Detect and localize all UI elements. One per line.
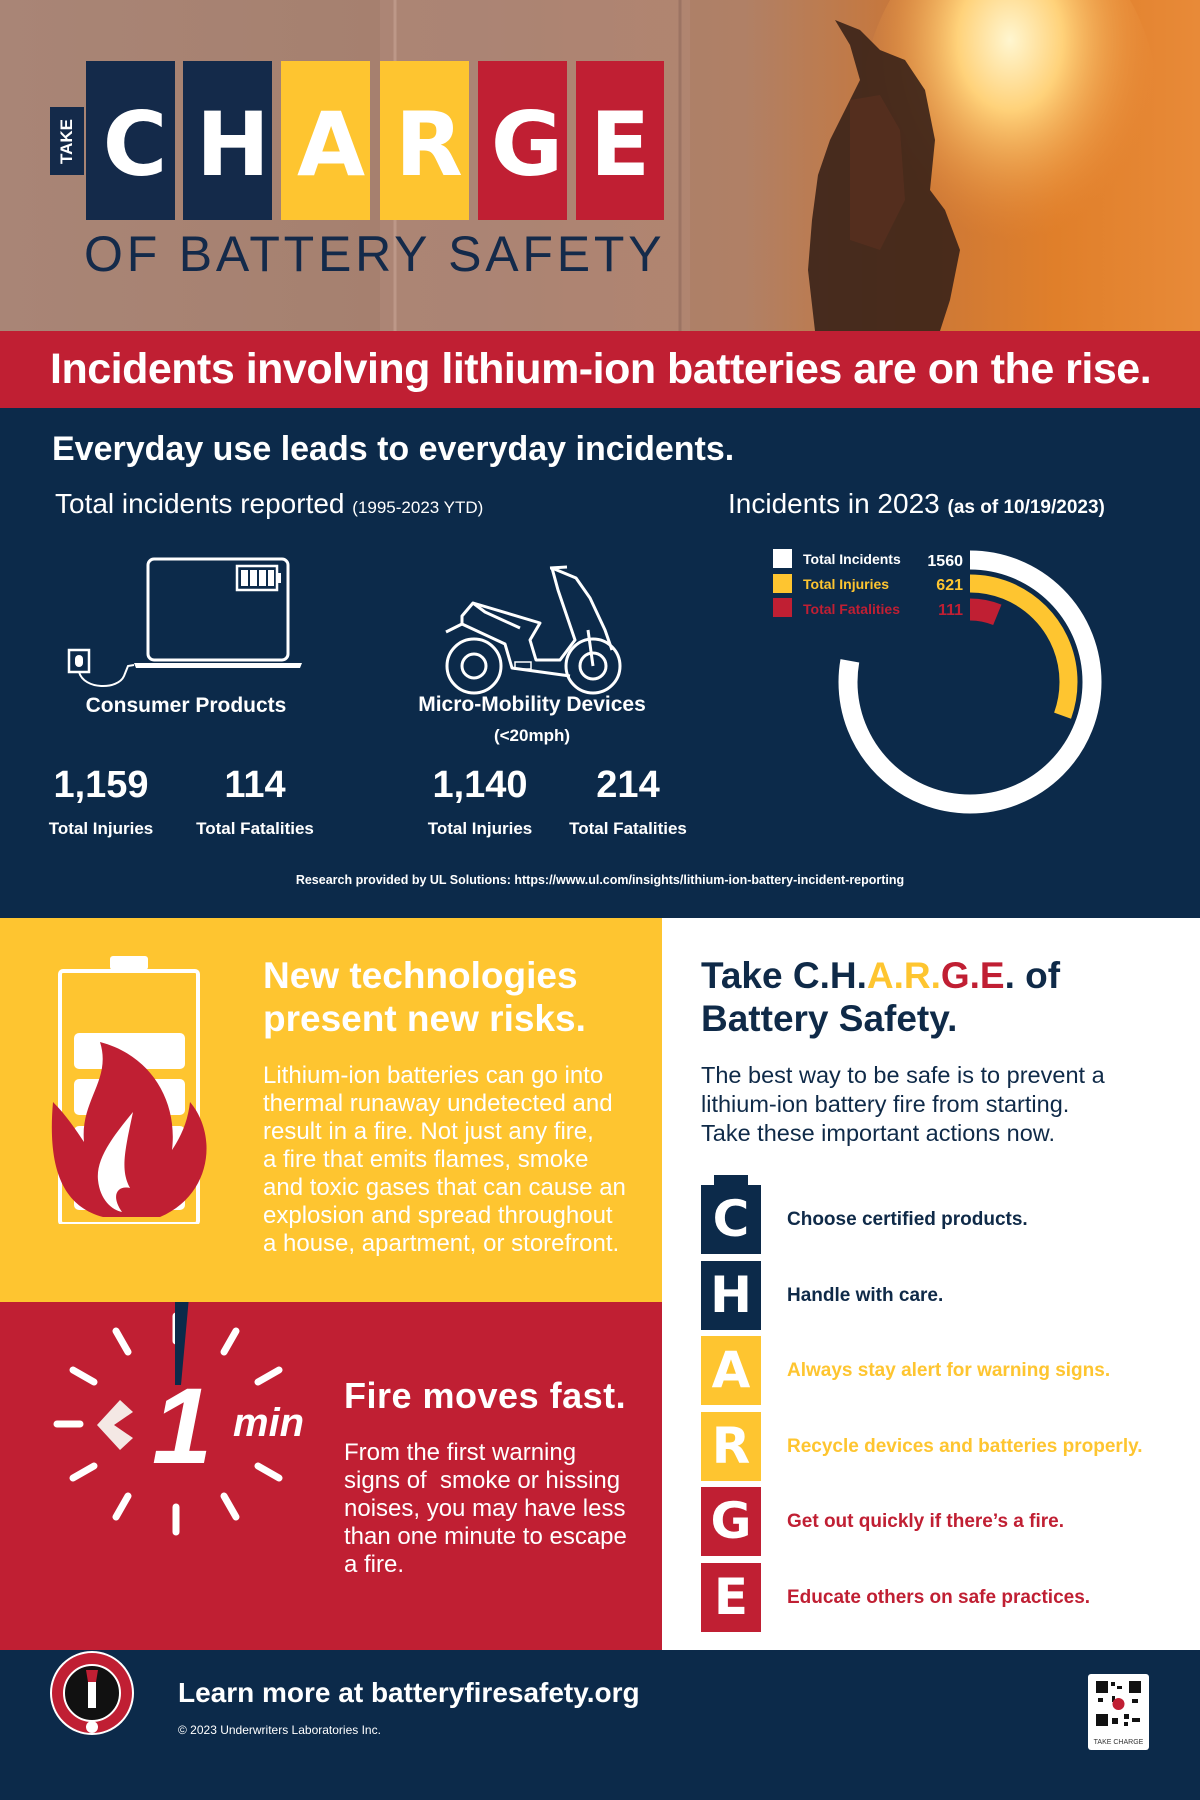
action list: Get out quickly if there’s a fire. [787,1511,1064,1532]
stat: mobility injuries: 1,140 [432,764,528,806]
action list: Choose certified products. [787,1209,1028,1230]
logo tiles [86,61,175,220]
stat: consumer injuries: 1,159 [53,764,149,806]
icon: one minute clock: min [233,1401,304,1445]
intro text: Take these important actions now. [701,1120,1055,1146]
donut chart: Total Injuries [803,576,889,592]
body text: and toxic gases that can cause an [263,1174,626,1201]
stat: consumer injuries: Total Injuries [49,819,153,838]
body text: than one minute to escape [344,1523,627,1550]
body text [263,1062,626,1257]
donut chart: 111 [938,602,963,619]
heading: Battery Safety. [701,998,957,1039]
stat: consumer injuries [48,764,153,838]
icon: one minute clock: 1 [152,1365,212,1486]
donut chart: 1560 [927,553,963,570]
panel: incident statistics [0,408,1200,918]
body text: thermal runaway undetected and [263,1090,613,1117]
CHARGE letter tiles [701,1175,761,1632]
heading: Everyday use leads to everyday incidents. [52,430,734,468]
learn more link text: Learn more at batteryfiresafety.org [178,1677,640,1708]
action list: Handle with care. [787,1285,943,1306]
banner: incidents on the rise [0,331,1200,408]
body text: result in a fire. Not just any fire, [263,1118,594,1145]
subheading 2023: Incidents in 2023 (as of 10/19/2023) [728,488,1105,519]
heading: Take C.H.A.R.G.E. of [701,955,1060,996]
body text: a fire. [344,1551,404,1578]
copyright: © 2023 Underwriters Laboratories Inc. [178,1723,381,1737]
heading: Fire moves fast. [344,1375,626,1416]
body text: a fire that emits flames, smoke [263,1146,588,1173]
label: consumer products: Consumer Products [86,694,286,717]
CHARGE letters: G [491,93,563,196]
panel: fire moves fast [0,1302,662,1650]
body text: noises, you may have less [344,1495,625,1522]
action list: Recycle devices and batteries properly. [787,1436,1143,1457]
body text: explosion and spread throughout [263,1202,613,1229]
action list: Educate others on safe practices. [787,1587,1090,1608]
TAKE tag: TAKE [57,118,76,164]
intro text: lithium-ion battery fire from starting. [701,1091,1069,1117]
TAKE tag [50,107,84,175]
panel: new technologies [0,918,662,1302]
CHARGE letters: C [103,93,167,196]
CHARGE letter tiles: E [714,1568,748,1626]
banner: incidents on the rise: Incidents involving lithium-ion batteries are on the rise. [50,345,1151,393]
logo: Take CHARGE of battery safety [50,61,665,282]
donut chart: 621 [936,577,963,594]
icon: scooter [445,566,622,694]
stat: consumer fatalities: Total Fatalities [196,819,314,838]
stat: mobility fatalities [569,764,687,838]
body text [344,1439,627,1578]
stat: mobility fatalities: 214 [596,764,660,806]
CHARGE letter tiles: H [710,1266,752,1324]
intro text [701,1062,1105,1146]
CHARGE letters: H [196,93,270,196]
CHARGE letters [103,93,650,196]
label: micro-mobility [418,693,646,745]
stat: mobility injuries [428,764,532,838]
QR code [1088,1674,1149,1750]
CHARGE letters: R [395,93,463,196]
body text: signs of smoke or hissing [344,1467,620,1494]
QR code: TAKE CHARGE [1094,1739,1144,1746]
icon: one minute clock [54,1302,304,1536]
action list: Always stay alert for warning signs. [787,1360,1110,1381]
intro text: The best way to be safe is to prevent a [701,1062,1105,1088]
CHARGE letter tiles: R [712,1417,750,1475]
OF BATTERY SAFETY: OF BATTERY SAFETY [84,226,665,282]
label: micro-mobility: Micro-Mobility Devices [418,693,646,716]
donut chart: Total Fatalities [803,601,900,617]
heading [263,955,586,1039]
CHARGE letter tiles: A [712,1341,750,1399]
label: micro-mobility: (<20mph) [494,726,570,745]
scooter silhouette [808,20,960,331]
icon: fire safety research institute seal [50,1651,134,1735]
footer [0,1650,1200,1800]
icon: laptop [68,558,302,687]
body text: From the first warning [344,1439,576,1466]
subheading total: Total incidents reported (1995-2023 YTD) [55,488,483,519]
stat: consumer fatalities [196,764,314,838]
stat: mobility fatalities: Total Fatalities [569,819,687,838]
icon: battery on fire [52,956,207,1224]
action list [787,1209,1143,1608]
stat: mobility injuries: Total Injuries [428,819,532,838]
heading [701,955,1060,1039]
stat: consumer fatalities: 114 [224,764,286,806]
panel: take CHARGE actions [662,918,1200,1650]
CHARGE letter tiles: G [710,1492,752,1550]
donut chart: Total Incidents [803,551,901,567]
CHARGE letters: E [590,93,650,196]
body text: Lithium-ion batteries can go into [263,1062,603,1089]
body text: a house, apartment, or storefront. [263,1230,619,1257]
CHARGE letters: A [297,93,365,196]
donut chart [773,549,1102,814]
heading: New technologies [263,955,578,996]
research credit: Research provided by UL Solutions: https://www.ul.com/insights/lithium-ion-battery-incident-reporting [296,873,904,887]
heading: present new risks. [263,998,586,1039]
CHARGE letter tiles: C [713,1190,749,1248]
hero photo background [0,0,1200,331]
